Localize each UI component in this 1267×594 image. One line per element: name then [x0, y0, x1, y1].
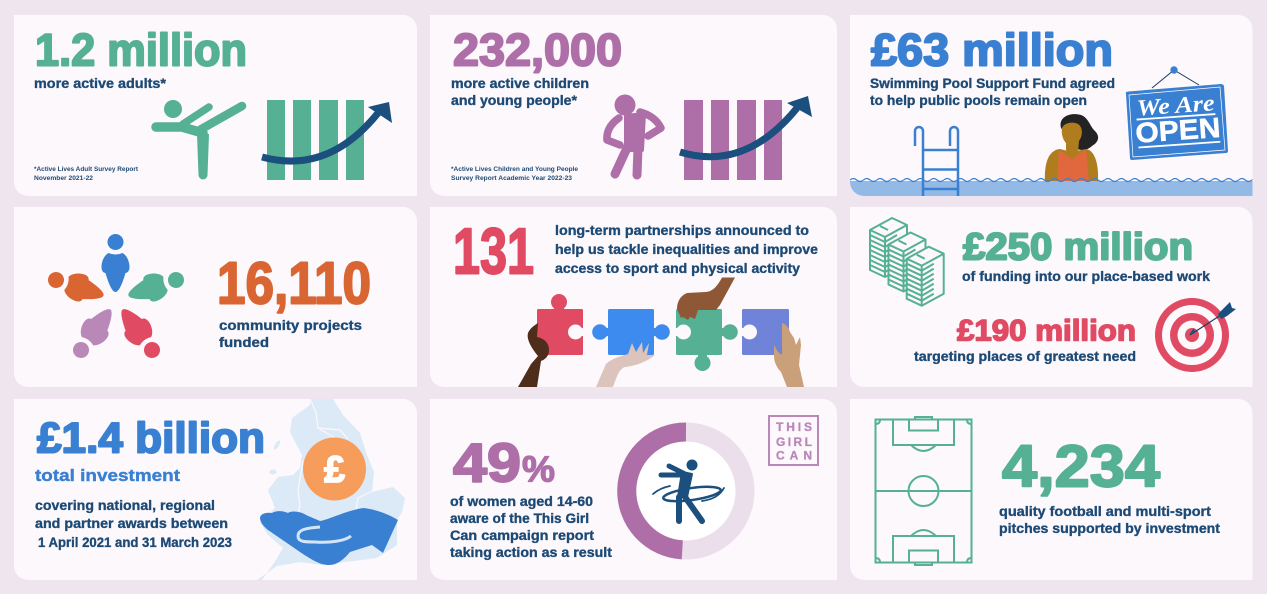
heading: 1.2 million: 1.2 million	[35, 24, 247, 76]
text: quality pitches: quality football and multi-sport	[999, 503, 1211, 519]
water	[850, 177, 1252, 196]
icon: pool ladder	[915, 127, 958, 196]
heading: £250 million: £250 million	[963, 226, 1193, 268]
text: more active children: and young people*	[451, 92, 578, 108]
logo: This Girl Can: GIRL	[776, 435, 812, 449]
arrow: rising trend	[680, 96, 812, 157]
bar chart: purple bars	[684, 100, 782, 180]
text: covering awards: covering national, regional	[35, 497, 215, 513]
icon: brown hand	[677, 278, 735, 320]
text: covering awards: 1 April 2021 and 31 March 2023	[38, 534, 232, 550]
icon: stacks of money	[870, 218, 944, 306]
icon: indigo puzzle piece	[741, 309, 789, 355]
icon: tan hand	[774, 323, 804, 387]
heading: 49%: 49	[453, 432, 521, 494]
panel: £250 million place-based funding	[850, 207, 1252, 387]
panel: 4,234 football pitches	[850, 399, 1252, 580]
panel: £1.4 billion total investment	[14, 399, 417, 580]
icon: blue puzzle piece	[592, 309, 670, 355]
text: swimming pool support fund: Swimming Pool Support Fund agreed	[870, 75, 1115, 91]
arrow: rising trend	[262, 102, 392, 161]
text: more active children: more active children	[451, 75, 589, 91]
text: partnerships description: long-term partnerships announced to	[555, 222, 809, 238]
panel: 1.2 million more active adults	[14, 15, 417, 196]
icon: we are open sign: We Are	[1136, 90, 1215, 121]
text: more active adults: more active adults*	[34, 75, 167, 91]
icon: green puzzle piece	[675, 309, 738, 371]
icon: open hand	[260, 508, 398, 565]
icon: kicking figure	[156, 100, 242, 180]
text: swimming pool support fund	[870, 75, 1115, 108]
donut chart: 49 percent	[627, 432, 745, 550]
icon: child with hoop pose	[607, 94, 661, 175]
icon: hula hoop figure	[653, 460, 724, 521]
footnote: children survey	[451, 166, 578, 182]
text: quality pitches: pitches supported by investment	[999, 520, 1220, 536]
text: covering awards: and partner awards between	[35, 515, 228, 531]
text: covering awards	[35, 497, 232, 550]
text: partnerships description	[555, 222, 818, 276]
icon: five people in a circle	[44, 234, 188, 365]
footnote: adult survey	[34, 166, 139, 182]
heading: 232,000: 232,000	[453, 24, 622, 76]
icon: we are open sign	[1126, 66, 1228, 160]
icon: dark hand	[518, 323, 549, 387]
text: women aged 14-60: Can campaign report	[450, 527, 594, 543]
text: places of greatest need: targeting places of greatest need	[914, 348, 1136, 364]
heading: 49%: %	[522, 448, 555, 490]
map of England and Wales	[257, 399, 405, 580]
footnote: adult survey: *Active Lives Adult Survey Report	[34, 166, 139, 173]
icon: pound coin	[303, 438, 366, 500]
heading: 4,234: 4,234	[1002, 434, 1160, 500]
text: community projects funded	[219, 317, 362, 350]
text: swimming pool support fund: to help public pools remain open	[870, 92, 1087, 108]
text: community projects funded: funded	[219, 334, 269, 350]
text: women aged 14-60	[450, 493, 612, 560]
icon: red puzzle piece	[537, 294, 584, 355]
heading: 131: 131	[453, 214, 534, 288]
heading: 16,110: 16,110	[217, 250, 371, 316]
icon: target with arrow	[1155, 298, 1236, 372]
text: place-based work: of funding into our place-based work	[962, 268, 1210, 284]
panel: 16,110 community projects	[14, 207, 417, 387]
panel: 49% This Girl Can	[430, 399, 837, 580]
footnote: adult survey: November 2021-22	[34, 175, 93, 182]
text: women aged 14-60: of women aged 14-60	[450, 493, 593, 509]
text: more active children	[451, 75, 589, 108]
heading: 49%	[453, 432, 555, 494]
footnote: children survey: *Active Lives Children and Young People	[451, 166, 578, 173]
panel: 232,000 more active children	[430, 15, 837, 196]
icon: pale hand	[596, 342, 655, 387]
text: partnerships description: help us tackle inequalities and improve	[555, 241, 818, 257]
text: women aged 14-60: taking action as a result	[450, 544, 612, 560]
text: partnerships description: access to sport and physical activity	[555, 260, 800, 276]
text: total investment: total investment	[35, 466, 180, 485]
logo: This Girl Can: CAN	[776, 448, 812, 462]
text: women aged 14-60: aware of the This Girl	[450, 510, 589, 526]
heading: £1.4 billion: £1.4 billion	[37, 414, 265, 462]
footnote: children survey: Survey Report Academic Year 2022-23	[451, 175, 572, 182]
icon: pound coin: £	[324, 449, 345, 490]
icon: we are open sign: OPEN	[1134, 112, 1221, 149]
bar chart: green bars	[267, 100, 364, 180]
panel: 131 long-term partnerships	[430, 207, 837, 387]
panel: £63 million swimming pool fund	[850, 15, 1252, 196]
icon: football pitch	[876, 417, 972, 565]
logo: This Girl Can	[769, 416, 818, 465]
heading: £190 million: £190 million	[957, 314, 1136, 348]
heading: £63 million: £63 million	[871, 24, 1113, 76]
logo: This Girl Can: THIS	[776, 420, 812, 434]
text: quality pitches	[999, 503, 1220, 536]
icon: woman in pool	[1045, 114, 1098, 182]
text: community projects funded: community projects	[219, 317, 362, 333]
